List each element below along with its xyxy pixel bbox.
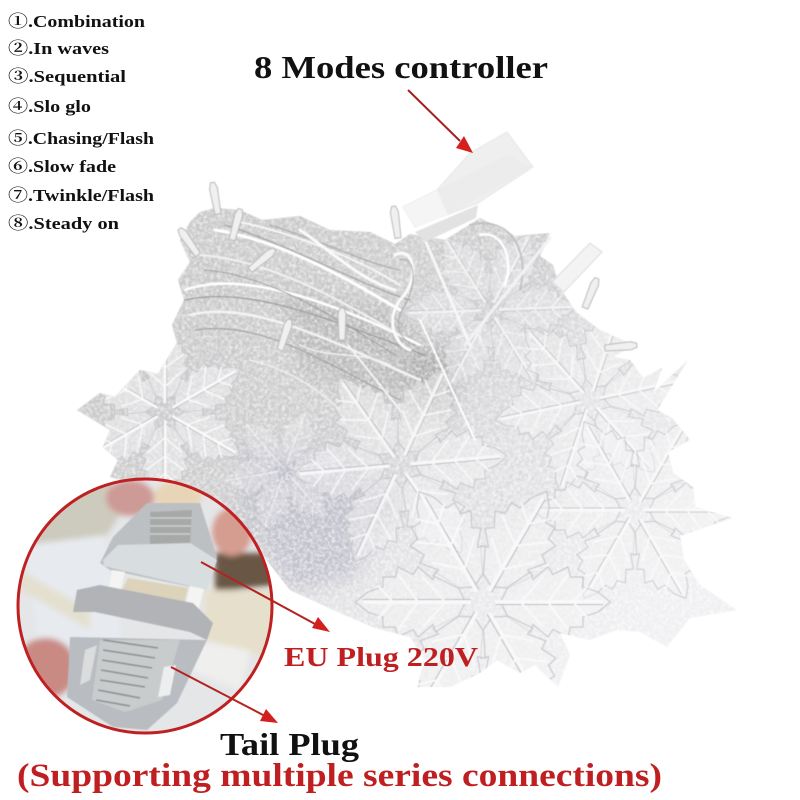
- wire bundle: [185, 222, 550, 440]
- photo background: [15, 476, 277, 738]
- mode 5: ⑤.Chasing/Flash: [8, 129, 155, 148]
- cluster silhouette: [77, 208, 737, 687]
- plug upper body: [67, 503, 217, 730]
- mode 1: ①.Combination: [8, 12, 146, 31]
- controller box: [403, 132, 533, 242]
- arrow: tail plug: [171, 667, 278, 723]
- plug lower body: [67, 637, 207, 730]
- speckle texture: [78, 209, 684, 669]
- snowflakes: [98, 234, 730, 687]
- stray bulbs: [176, 182, 637, 352]
- mode 4: ④.Slo glo: [8, 97, 91, 116]
- arrow: controller: [408, 90, 473, 153]
- mode 8: ⑧.Steady on: [8, 214, 120, 233]
- shaded inner areas: [240, 290, 460, 590]
- label: EU plug: EU Plug 220V: [284, 642, 479, 672]
- mode 2: ②.In waves: [8, 39, 109, 58]
- plug collar: [73, 585, 213, 640]
- mode list: [8, 12, 155, 233]
- mode 3: ③.Sequential: [8, 67, 126, 86]
- magnifier ring: [18, 479, 272, 733]
- heading: controller: 8 Modes controller: [254, 49, 548, 85]
- label: tail plug: Tail Plug: [220, 726, 359, 762]
- mode 6: ⑥.Slow fade: [8, 157, 117, 176]
- arrow: EU plug: [201, 562, 330, 632]
- caption: series connections: (Supporting multiple series connections): [17, 758, 662, 794]
- mode 7: ⑦.Twinkle/Flash: [8, 186, 155, 205]
- inset magnifier: plug photo: [15, 476, 277, 738]
- fingers: [106, 480, 154, 516]
